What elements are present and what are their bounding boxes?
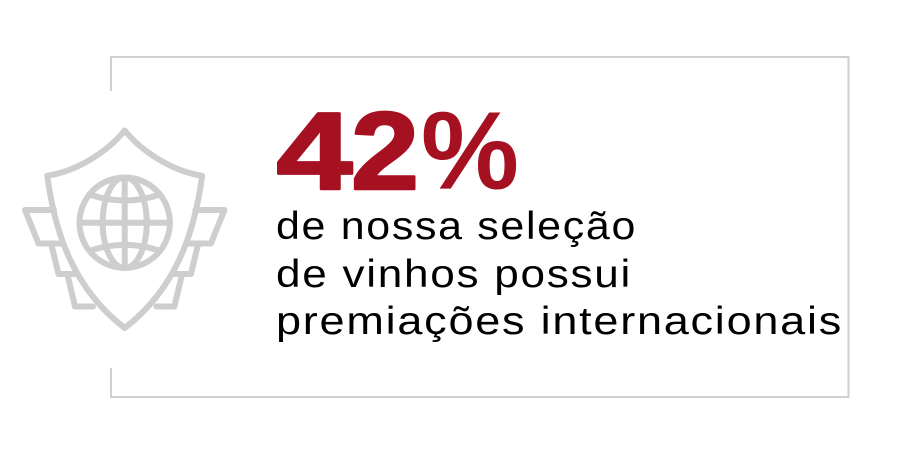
frame (111, 57, 848, 397)
digit 4: 4 (276, 90, 352, 213)
icon: left wing (25, 210, 93, 306)
icon: right wing (156, 210, 224, 306)
digit 2: 2 (351, 90, 419, 213)
headline number (276, 90, 519, 213)
text line 3: premiações internacionais (276, 300, 843, 343)
description text (276, 205, 843, 343)
icon: shield with globe (25, 130, 224, 328)
icon: globe (80, 178, 170, 268)
percent sign: % (421, 90, 519, 212)
text line 1: de nossa seleção (276, 205, 637, 248)
text line 2: de vinhos possui (276, 253, 632, 296)
icon: shield outline (47, 130, 202, 328)
